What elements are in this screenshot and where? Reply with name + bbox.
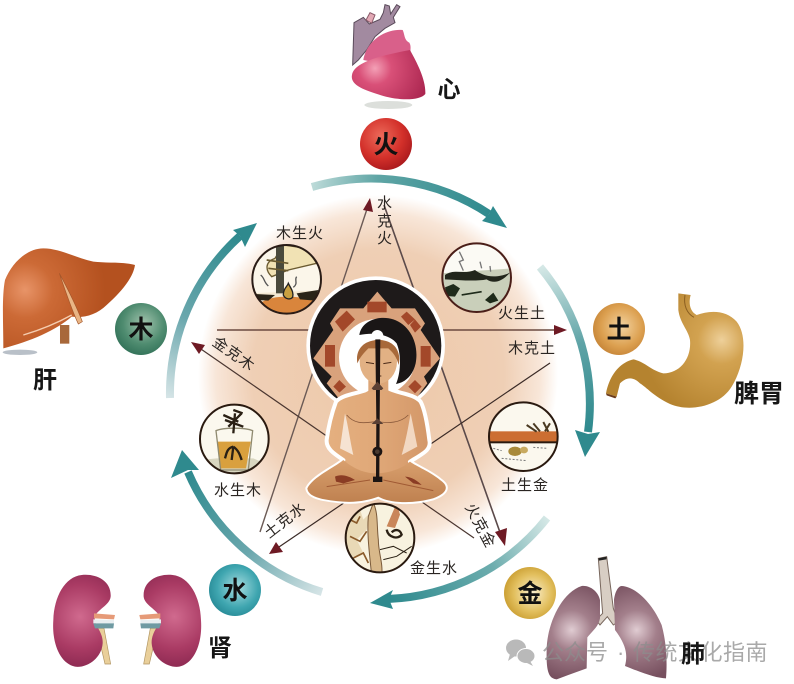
label: water controls fire: 水 (377, 195, 393, 212)
vignette: metal generates water (345, 503, 415, 576)
right kidney (139, 575, 201, 667)
ball: metal (504, 567, 556, 619)
watermark text: 公众号 (542, 640, 608, 665)
head (357, 340, 399, 392)
stomach organ (606, 293, 743, 408)
label: water generates wood: 水生木 (214, 482, 262, 499)
label: water controls fire: 火 (377, 230, 393, 247)
central energy channel (372, 339, 383, 482)
label: lung: 肺 (681, 641, 705, 668)
ball: water (209, 564, 261, 616)
label: earth controls water: 土克水 (261, 499, 309, 542)
label: wood generates fire: 木生火 (276, 225, 324, 242)
lungs organ (547, 557, 667, 679)
vignette: earth generates metal (487, 402, 560, 472)
watermark icon (506, 640, 535, 666)
ball: earth: 土 (606, 316, 632, 344)
ball: water: 水 (222, 577, 248, 605)
label: fire controls metal: 火克金 (461, 501, 499, 551)
body (307, 388, 446, 502)
vignette: water generates wood (199, 404, 269, 477)
generating cycle arrow: fire to earth (312, 179, 507, 228)
generating cycle arrow: metal to water (370, 518, 547, 609)
ball: wood: 木 (128, 316, 154, 344)
ball: wood (115, 303, 167, 355)
central meditating figure (306, 276, 446, 502)
liver organ (3, 248, 135, 355)
label: heart: 心 (438, 76, 460, 102)
generating cycle arrow: water to wood (171, 450, 322, 592)
heart organ (352, 5, 425, 109)
controlling star lines and arrows (191, 198, 567, 554)
label: metal generates water: 金生水 (410, 560, 458, 577)
left kidney (53, 575, 115, 667)
label: spleen and stomach: 脾胃 (734, 380, 784, 408)
generating cycle arrow: wood to fire (170, 223, 257, 398)
label: wood controls earth: 木克土 (508, 340, 556, 357)
kidneys organ (53, 575, 201, 667)
ball: fire (360, 118, 412, 170)
label: water controls fire (377, 195, 393, 247)
label: kidney: 肾 (208, 635, 232, 662)
generating cycle arrow: earth to metal (540, 267, 600, 457)
ball: fire: 火 (373, 131, 399, 159)
label: water controls fire: 克 (377, 213, 393, 230)
ball: metal: 金 (517, 580, 543, 608)
label: fire generates earth: 火生土 (498, 305, 546, 322)
label: liver: 肝 (33, 367, 57, 394)
peach background glow (198, 195, 558, 555)
watermark text: 传统文化指南 (633, 640, 768, 665)
label: earth generates metal: 土生金 (501, 477, 549, 494)
ball: earth (593, 303, 645, 355)
label: metal controls wood: 金克木 (209, 334, 258, 375)
vignette: fire generates earth (440, 243, 513, 313)
mandala halo (306, 276, 445, 415)
watermark text: · (617, 640, 624, 665)
vignette: wood generates fire (251, 244, 322, 315)
